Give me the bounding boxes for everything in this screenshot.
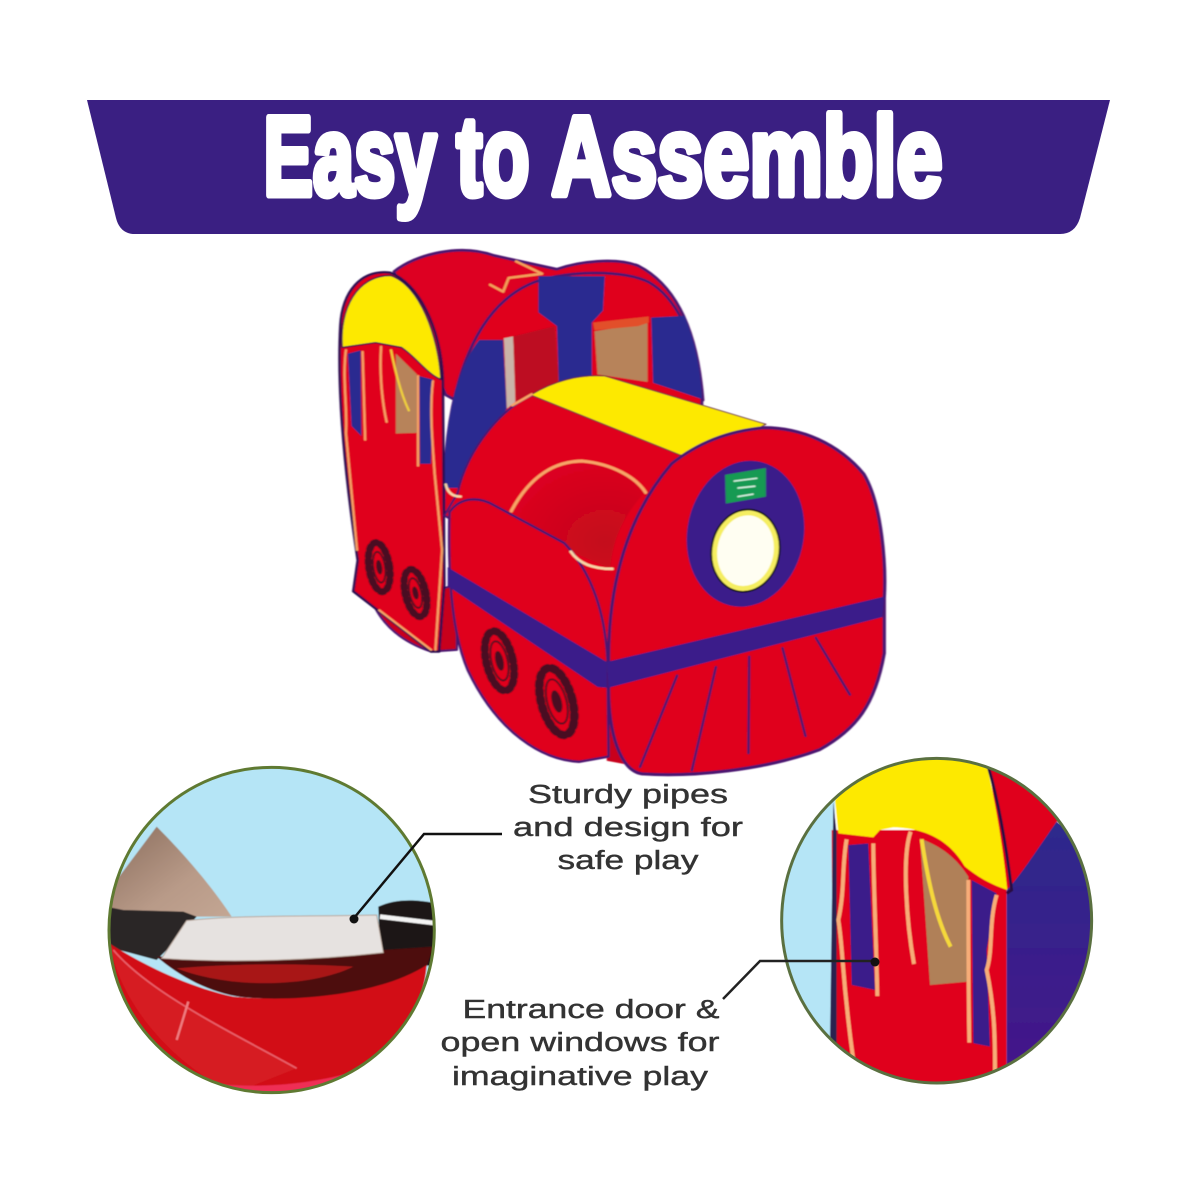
rear wheels <box>365 541 431 619</box>
callout text: sturdy pipes: safe play <box>558 847 699 875</box>
white pipe <box>162 915 383 961</box>
headlamp <box>706 505 785 596</box>
rear roof <box>394 250 703 447</box>
lower side skirt <box>448 499 631 765</box>
callout text: sturdy pipes <box>513 781 744 875</box>
boiler side <box>444 376 766 660</box>
cabin arch <box>444 273 702 516</box>
inner shadow <box>157 947 433 999</box>
door ties <box>345 347 442 650</box>
detail circle: sturdy pipe <box>100 760 447 1100</box>
train tent illustration <box>340 250 885 775</box>
title: Easy <box>264 94 436 219</box>
leader line: pipe callout <box>350 834 502 924</box>
sky strip <box>783 800 836 1037</box>
roof zigzag trim <box>490 261 542 292</box>
window panels <box>848 843 875 990</box>
logo badge <box>725 468 766 503</box>
callout text: entrance door: imaginative play <box>452 1063 708 1091</box>
red door fabric <box>832 830 1007 1093</box>
yellow boiler top <box>531 376 766 464</box>
title: Assemble <box>552 94 942 219</box>
title: to <box>456 94 530 219</box>
callout text: entrance door: Entrance door & <box>462 996 720 1024</box>
title <box>264 94 942 219</box>
leader line: door callout <box>723 958 880 999</box>
dark strap <box>107 907 197 960</box>
headlamp surround <box>677 454 814 614</box>
red fabric <box>111 944 428 1087</box>
red roof wedge <box>990 770 1058 890</box>
callout text: entrance door <box>440 996 720 1091</box>
cowcatcher spokes <box>640 638 850 770</box>
finger <box>107 827 232 920</box>
boiler arch door <box>511 460 646 569</box>
boiler front face <box>607 428 885 775</box>
title banner <box>87 94 1110 234</box>
rear door panel <box>340 272 457 652</box>
navy side panel <box>1006 820 1090 1064</box>
yellow roof cap <box>342 275 441 379</box>
detail circle: door and windows <box>780 756 1094 1084</box>
yellow cap <box>835 757 1007 890</box>
callout text: entrance door: open windows for <box>440 1029 720 1057</box>
callout text: sturdy pipes: Sturdy pipes <box>528 781 728 809</box>
orange ties <box>838 832 997 1072</box>
side wheels <box>480 629 581 738</box>
callout text: sturdy pipes: and design for <box>513 814 744 842</box>
